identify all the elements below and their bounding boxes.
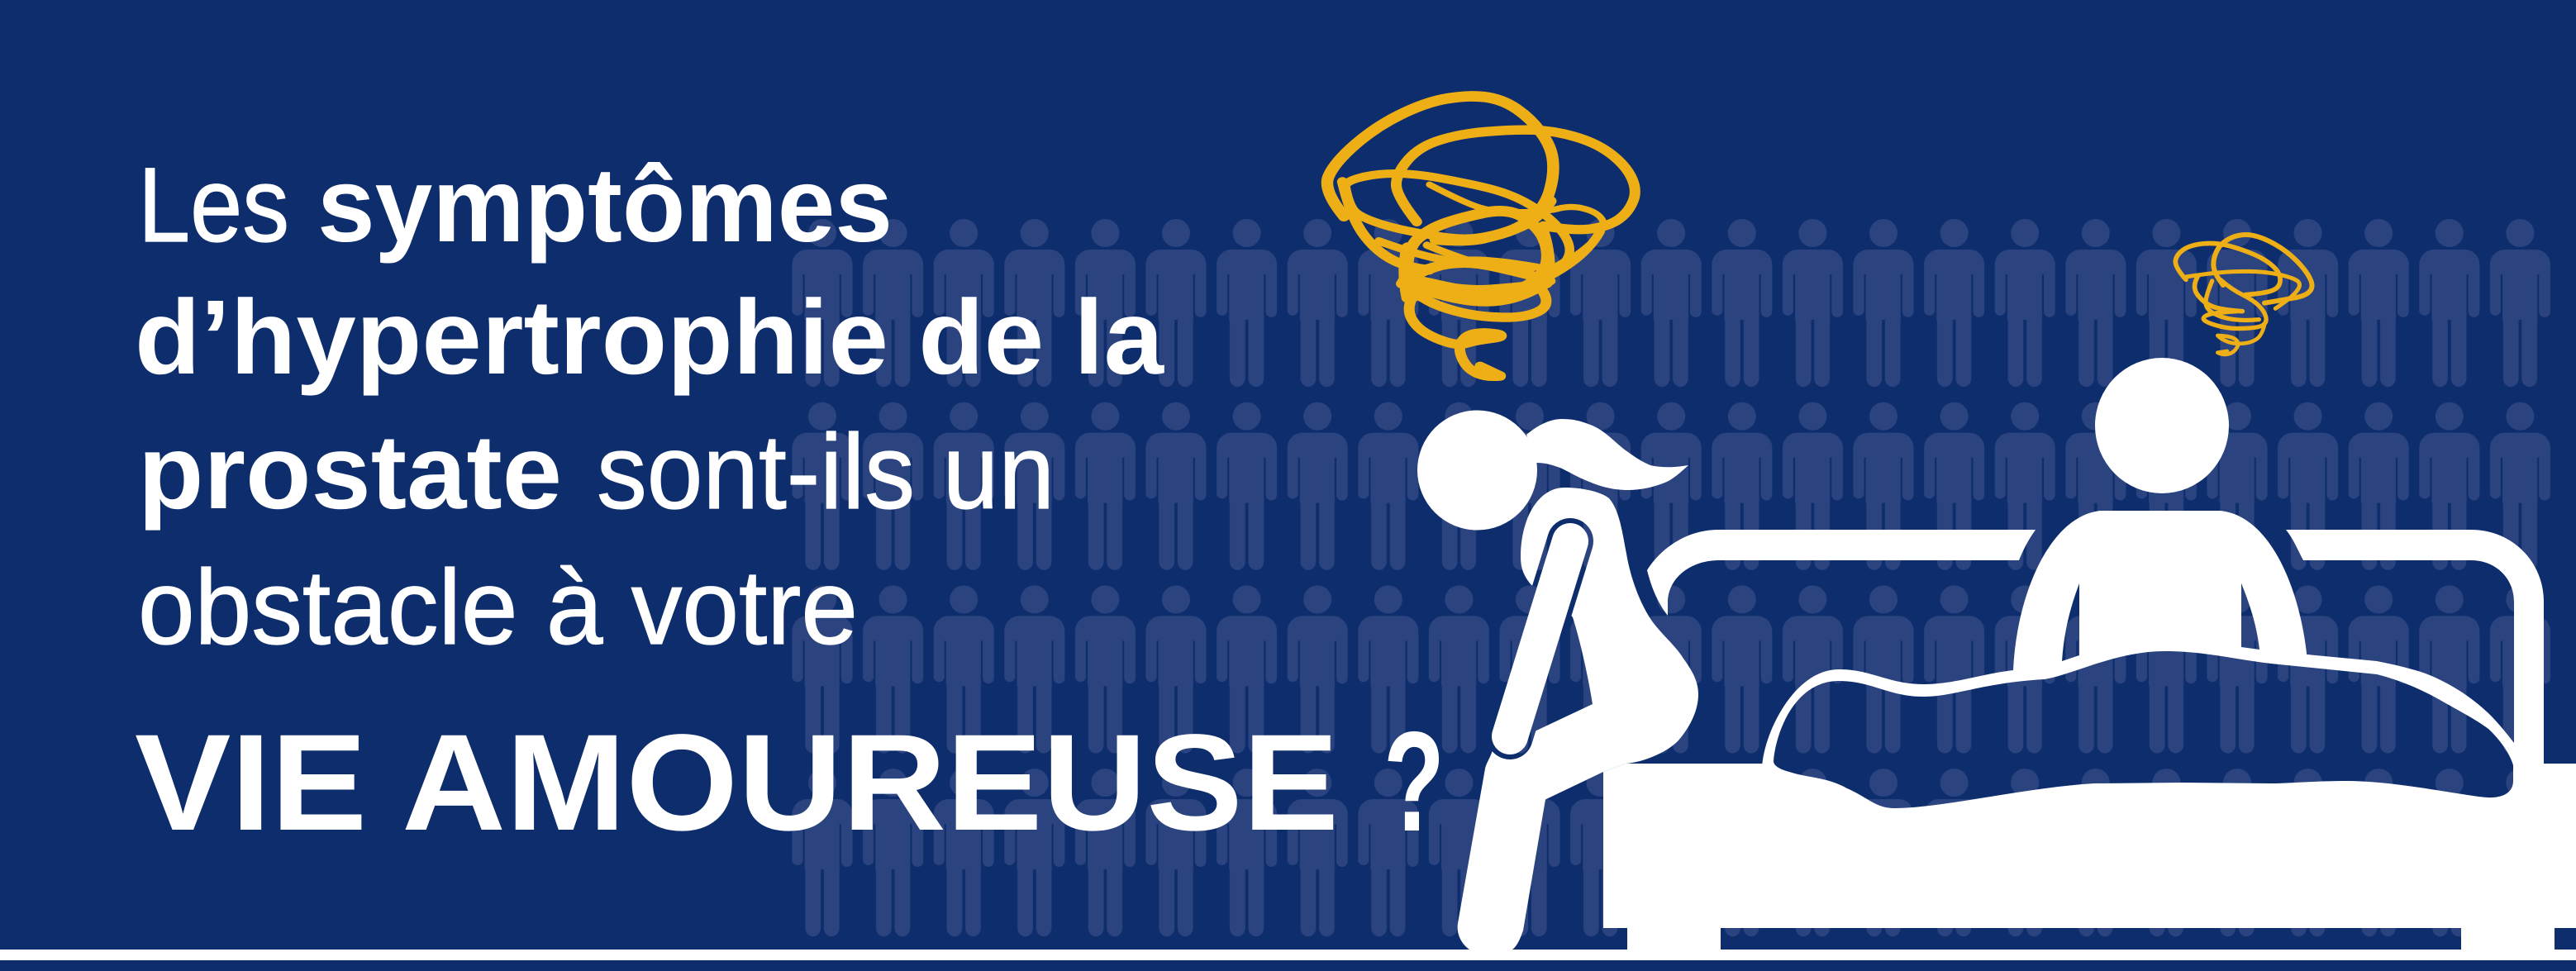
woman ponytail bbox=[1526, 419, 1688, 490]
title: Les bbox=[138, 146, 289, 264]
title: sont-ils un bbox=[597, 413, 1055, 531]
icon: small gold scribble above man bbox=[2175, 235, 2312, 355]
headboard right bbox=[2286, 530, 2544, 769]
title: prostate bbox=[138, 413, 562, 531]
title: symptômes bbox=[317, 146, 893, 264]
title: ? bbox=[1383, 702, 1445, 861]
woman head bbox=[1417, 410, 1537, 531]
title: obstacle à votre bbox=[138, 549, 858, 667]
man head bbox=[2095, 358, 2229, 493]
icon: large gold scribble above woman bbox=[1327, 97, 1635, 376]
title: d’hypertrophie de la bbox=[135, 278, 1164, 397]
man torso bbox=[2013, 511, 2307, 686]
title bbox=[135, 146, 1445, 861]
blanket outline bbox=[1762, 654, 2514, 769]
woman arm bbox=[1510, 541, 1570, 736]
woman body and leg bbox=[1458, 488, 1698, 950]
title: VIE AMOUREUSE bbox=[135, 707, 1339, 859]
icon: woman sitting on bed bbox=[1417, 410, 1698, 950]
mattress and frame bbox=[1603, 764, 2576, 950]
icon: bed with man under blanket bbox=[1603, 358, 2576, 950]
ground line bbox=[0, 950, 2576, 960]
background pattern: rows of people bbox=[787, 216, 2555, 949]
headboard left bbox=[1647, 530, 2036, 616]
